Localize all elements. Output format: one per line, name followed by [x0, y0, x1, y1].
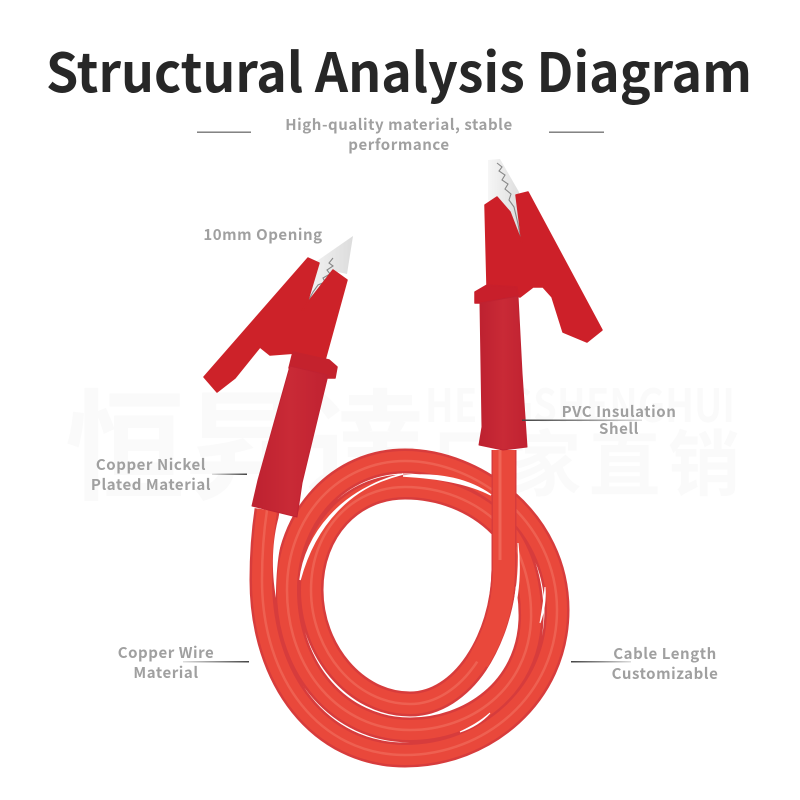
label: copper wire material: Material: [133, 662, 199, 683]
left handle: [252, 366, 328, 517]
subtitle: performance: [348, 134, 450, 155]
right clip: [475, 159, 602, 450]
leader: pvc: [522, 420, 642, 421]
right clip body: [485, 192, 602, 342]
cable gaps: [273, 474, 545, 732]
label: cable length customizable: Customizable: [612, 663, 718, 684]
right jaw teeth: [497, 163, 521, 240]
left jaw teeth: [306, 258, 333, 305]
leader: copper nickel: [212, 474, 247, 475]
label: copper nickel plated material: Copper Nickel: [96, 454, 206, 475]
label: pvc insulation shell: PVC Insulation: [562, 401, 676, 422]
subtitle: [285, 114, 513, 155]
label: copper wire material: [118, 642, 214, 683]
subtitle rule left: [197, 132, 251, 133]
subtitle rule right: [549, 132, 604, 133]
label: copper wire material: Copper Wire: [118, 642, 214, 663]
label: cable length customizable: [612, 643, 718, 684]
left clip body: [204, 258, 347, 392]
label: copper nickel plated material: Plated Material: [91, 474, 211, 495]
subtitle: High-quality material, stable: [285, 114, 513, 135]
leader: cable length: [571, 661, 631, 662]
label: pvc insulation shell: Shell: [599, 418, 639, 439]
right collar: [475, 285, 518, 303]
right handle: [479, 296, 527, 450]
left metal jaw: [303, 236, 353, 305]
leader: copper wire: [183, 661, 249, 662]
label: 10mm opening: 10mm Opening: [203, 224, 323, 245]
left collar: [289, 352, 337, 378]
label: copper nickel plated material: [91, 454, 211, 495]
right metal jaw: [488, 159, 522, 240]
label: cable length customizable: Cable Length: [613, 643, 717, 664]
coiled cable: [262, 450, 557, 755]
watermark: [65, 351, 740, 525]
title: Structural Analysis Diagram: [46, 29, 752, 108]
label: pvc insulation shell: [562, 401, 676, 439]
left clip: [204, 236, 353, 517]
